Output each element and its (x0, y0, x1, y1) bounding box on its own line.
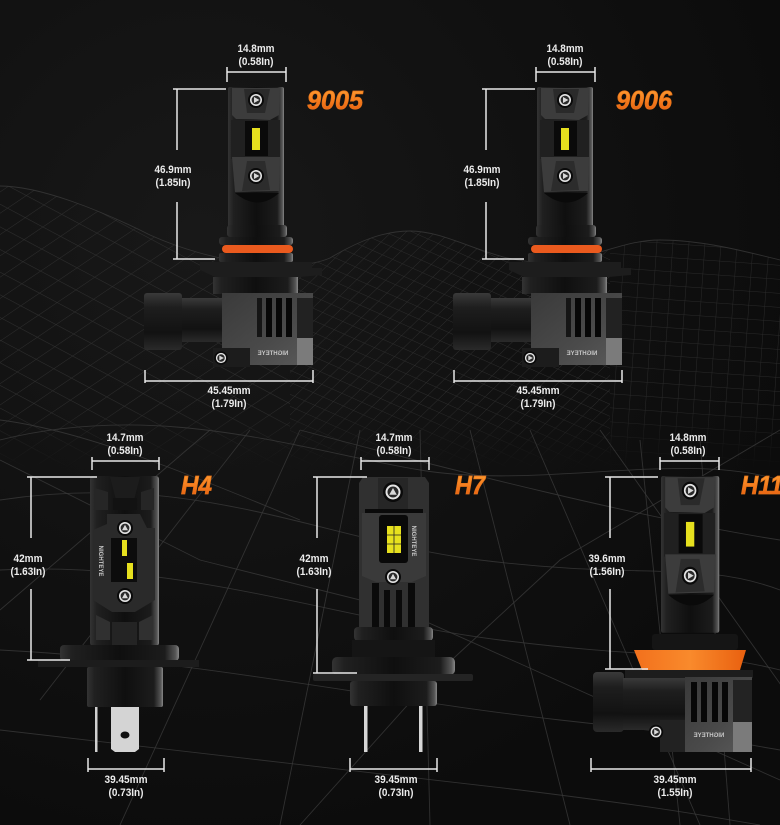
dimensions: H7: 42mm (300, 553, 329, 565)
dimensions: 9006 (454, 43, 622, 410)
dimensions: 9006: (0.58In) (548, 56, 583, 68)
brand text on 9006 driver: NIGHTEYE (567, 351, 597, 357)
brand text on 9005 driver: NIGHTEYE (258, 351, 288, 357)
dimensions: H4: 39.45mm (104, 774, 148, 786)
dimensions: 9005: (1.85In) (156, 177, 191, 189)
dimensions: H11: (1.56In) (590, 566, 625, 578)
dimensions: H7: 14.7mm (376, 432, 413, 444)
dimensions: 9006: 46.9mm (464, 164, 501, 176)
dimensions: H4: (1.63In) (10, 566, 46, 578)
dimensions: 9005 (145, 43, 313, 410)
bulb: H7 (313, 477, 473, 752)
title: 9005: 9005 (307, 85, 364, 115)
bulb: H4 (38, 476, 199, 752)
dimensions: H4: 42mm (14, 553, 43, 565)
dimensions: 9005: 46.9mm (154, 164, 192, 176)
dimensions: 9005: (0.58In) (238, 56, 274, 68)
dimensions: H11 (588, 432, 751, 799)
dimensions: H7: (0.73In) (378, 787, 414, 799)
brand text on H7: NIGHTEYE (410, 526, 416, 556)
title: H4: H4 (181, 470, 212, 500)
title: 9006: 9006 (616, 85, 673, 115)
bulb: H11 (593, 476, 753, 752)
dimensions: H4: 14.7mm (106, 432, 144, 444)
dimensions: H7: 39.45mm (374, 774, 418, 786)
dimensions: 9005: 45.45mm (208, 385, 251, 397)
dimensions: 9006: (1.85In) (464, 177, 500, 189)
dimensions: H4: (0.58In) (108, 445, 143, 457)
dimensions: 9005: 14.8mm (238, 43, 275, 55)
dimensions: H4 (10, 432, 164, 799)
brand text on H11 driver: NIGHTEYE (694, 733, 724, 739)
wireframe mesh background (0, 180, 780, 825)
title: H7: H7 (455, 470, 486, 500)
dimensions: H7 (296, 432, 437, 799)
bulb: 9006 (453, 87, 631, 367)
brand text on H4: NIGHTEYE (97, 546, 103, 576)
dimensions: 9006: 14.8mm (546, 43, 584, 55)
dimensions: H11: 39.6mm (588, 553, 626, 565)
dimensions: H4: (0.73In) (108, 787, 144, 799)
dimensions: H11: (1.55In) (658, 787, 693, 799)
dimensions: H7: (1.63In) (296, 566, 332, 578)
dimensions: H11: (0.58In) (670, 445, 706, 457)
bulb: 9005 (144, 87, 322, 367)
dimensions: H7: (0.58In) (376, 445, 412, 457)
dimensions: 9006: 45.45mm (516, 385, 560, 397)
dimensions: H11: 14.8mm (670, 432, 707, 444)
dimensions: H11: 39.45mm (654, 774, 697, 786)
dimensions: 9005: (1.79In) (212, 398, 247, 410)
dimensions: 9006: (1.79In) (520, 398, 556, 410)
